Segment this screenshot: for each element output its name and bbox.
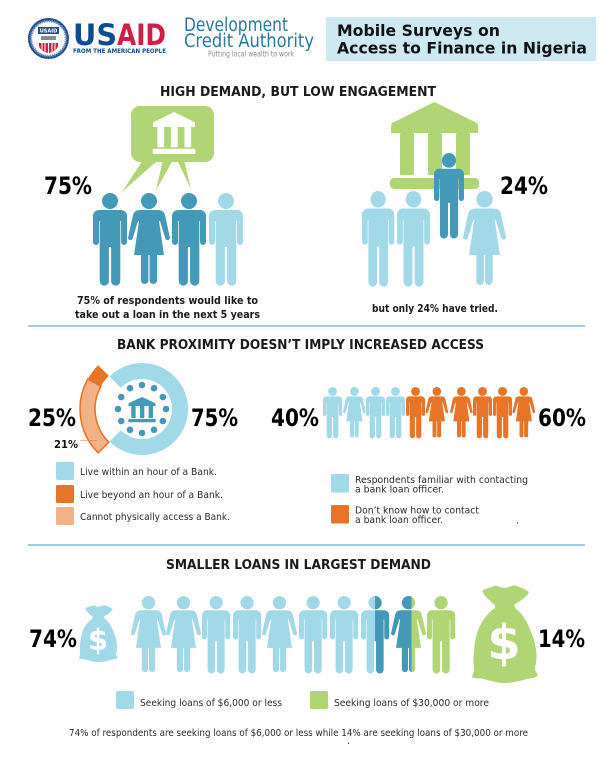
icon: small money bag: $ <box>88 623 108 657</box>
people row <box>131 596 455 674</box>
stat: 40%: 40% <box>271 404 319 432</box>
stat: 75%: 75% <box>191 404 238 432</box>
icon: bank <box>128 397 156 422</box>
legend <box>56 462 230 525</box>
donut: cannot access segment <box>80 379 109 453</box>
panel: bank proximity donut <box>28 363 238 525</box>
wordmark line two: Credit Authority <box>184 31 314 52</box>
tagline: Putting local wealth to work <box>208 50 295 58</box>
legend: Live beyond an hour of a Bank. <box>80 490 223 501</box>
icon: small money bag <box>79 605 118 662</box>
people row <box>93 193 243 286</box>
stat: 60%: 60% <box>538 404 586 432</box>
legend: Seeking loans of $30,000 or more <box>334 698 489 709</box>
donut: 75 percent within an hour <box>110 363 188 455</box>
wordmark line one: Development <box>184 15 288 36</box>
title: Access to Finance in Nigeria <box>337 38 587 58</box>
logo: Development Credit Authority <box>184 15 314 58</box>
panel: 24% have tried <box>362 102 548 315</box>
panel: 75% would like a loan <box>44 106 260 321</box>
icon: USAID seal: USAID <box>40 29 57 35</box>
stat: 75%: 75% <box>44 172 92 200</box>
legend: Respondents familiar with contacting <box>355 475 528 486</box>
legend <box>116 691 489 709</box>
wordmark: USAID: AID <box>117 18 166 52</box>
panel: smaller loans <box>29 585 585 747</box>
heading: bank proximity: BANK PROXIMITY DOESN’T IMPLY INCREASED ACCESS <box>117 338 484 353</box>
stat: 74%: 74% <box>29 625 77 653</box>
legend <box>331 474 528 526</box>
caption: 75% of respondents would like to <box>77 295 258 307</box>
heading: high demand: HIGH DEMAND, BUT LOW ENGAGEMENT <box>160 85 436 100</box>
people group <box>362 153 506 287</box>
people row <box>323 387 535 438</box>
icon: bank <box>390 102 479 189</box>
stat: 24%: 24% <box>500 172 548 200</box>
legend: a bank loan officer. <box>355 515 443 526</box>
caption: but only 24% have tried. <box>372 303 498 315</box>
legend: a bank loan officer. <box>355 484 444 496</box>
stat: 14%: 14% <box>538 625 585 653</box>
legend: Live within an hour of a Bank. <box>80 467 217 478</box>
dots ring <box>115 382 169 436</box>
legend: Cannot physically access a Bank. <box>80 512 230 523</box>
title: Mobile Surveys on <box>337 21 500 40</box>
wordmark: USAID: US <box>73 18 117 52</box>
heading: smaller loans: SMALLER LOANS IN LARGEST DEMAND <box>166 558 431 573</box>
caption <box>75 295 260 321</box>
panel: loan officer familiarity <box>271 387 586 526</box>
stat: 21% <box>54 439 97 451</box>
donut: beyond an hour segment <box>88 365 109 386</box>
logo: USAID <box>28 18 166 59</box>
speech bubble with bank icon <box>122 106 214 192</box>
caption: 74% of respondents are seeking loans of $6,000 or less while 14% are seeking loans of $30,000 or more <box>69 728 528 739</box>
icon: large money bag <box>472 585 538 683</box>
legend: Seeking loans of $6,000 or less <box>140 698 282 709</box>
stat: 25%: 25% <box>28 404 76 432</box>
title <box>326 17 596 61</box>
stray period: . <box>347 736 350 747</box>
tagline: from the American people: FROM THE AMERICAN PEOPLE <box>73 47 166 55</box>
legend: . <box>516 516 519 526</box>
legend: Don’t know how to contact <box>355 506 479 516</box>
caption: take out a loan in the next 5 years <box>75 309 260 321</box>
icon: large money bag: $ <box>487 615 521 671</box>
stat: 21%: 21% <box>54 439 78 451</box>
